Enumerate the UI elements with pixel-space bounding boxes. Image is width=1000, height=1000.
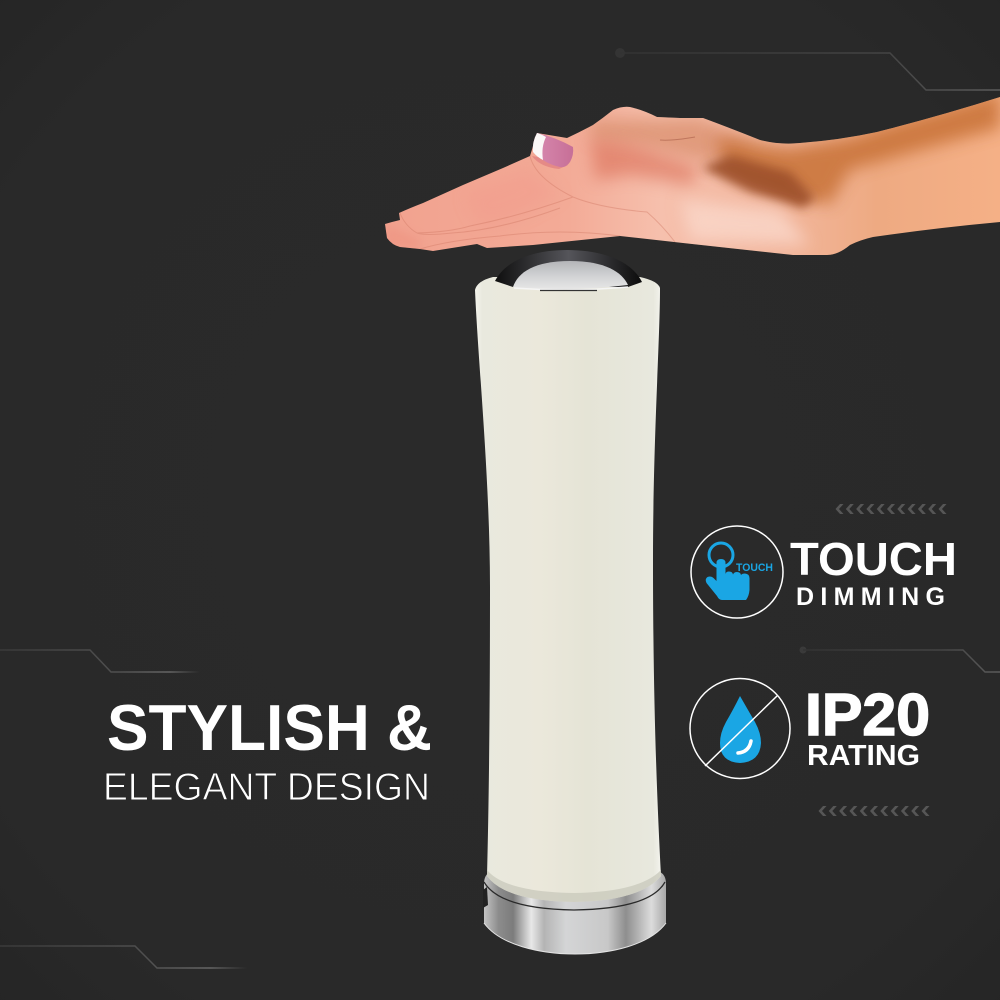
icon: water drop crossed (690, 678, 790, 778)
circuit line: bottom left (0, 946, 247, 968)
lamp (475, 250, 666, 954)
hand (385, 92, 1000, 255)
label: rating: RATING (807, 740, 920, 772)
feature: IP20 rating (690, 678, 930, 778)
label: dimming: DIMMING (796, 583, 945, 611)
lamp body (475, 277, 661, 902)
heading (103, 691, 432, 809)
frosted lower rim (487, 870, 661, 902)
circuit line: middle right (800, 646, 1000, 672)
label: IP20: IP20 (805, 682, 930, 748)
chevron row: top (836, 504, 946, 514)
label: touch: TOUCH (790, 533, 957, 585)
icon: touch: TOUCH (736, 562, 773, 574)
circuit line: middle left (0, 650, 200, 672)
icon: touch (691, 526, 783, 618)
circuit line: top right (615, 48, 1000, 90)
heading line 1: STYLISH & (107, 691, 432, 764)
fingernail (532, 133, 573, 169)
chevron row: bottom (818, 806, 930, 816)
lamp base (483, 872, 666, 954)
chrome dome (495, 250, 642, 290)
feature: touch dimming (691, 526, 957, 618)
heading line 2: ELEGANT DESIGN (103, 766, 430, 809)
